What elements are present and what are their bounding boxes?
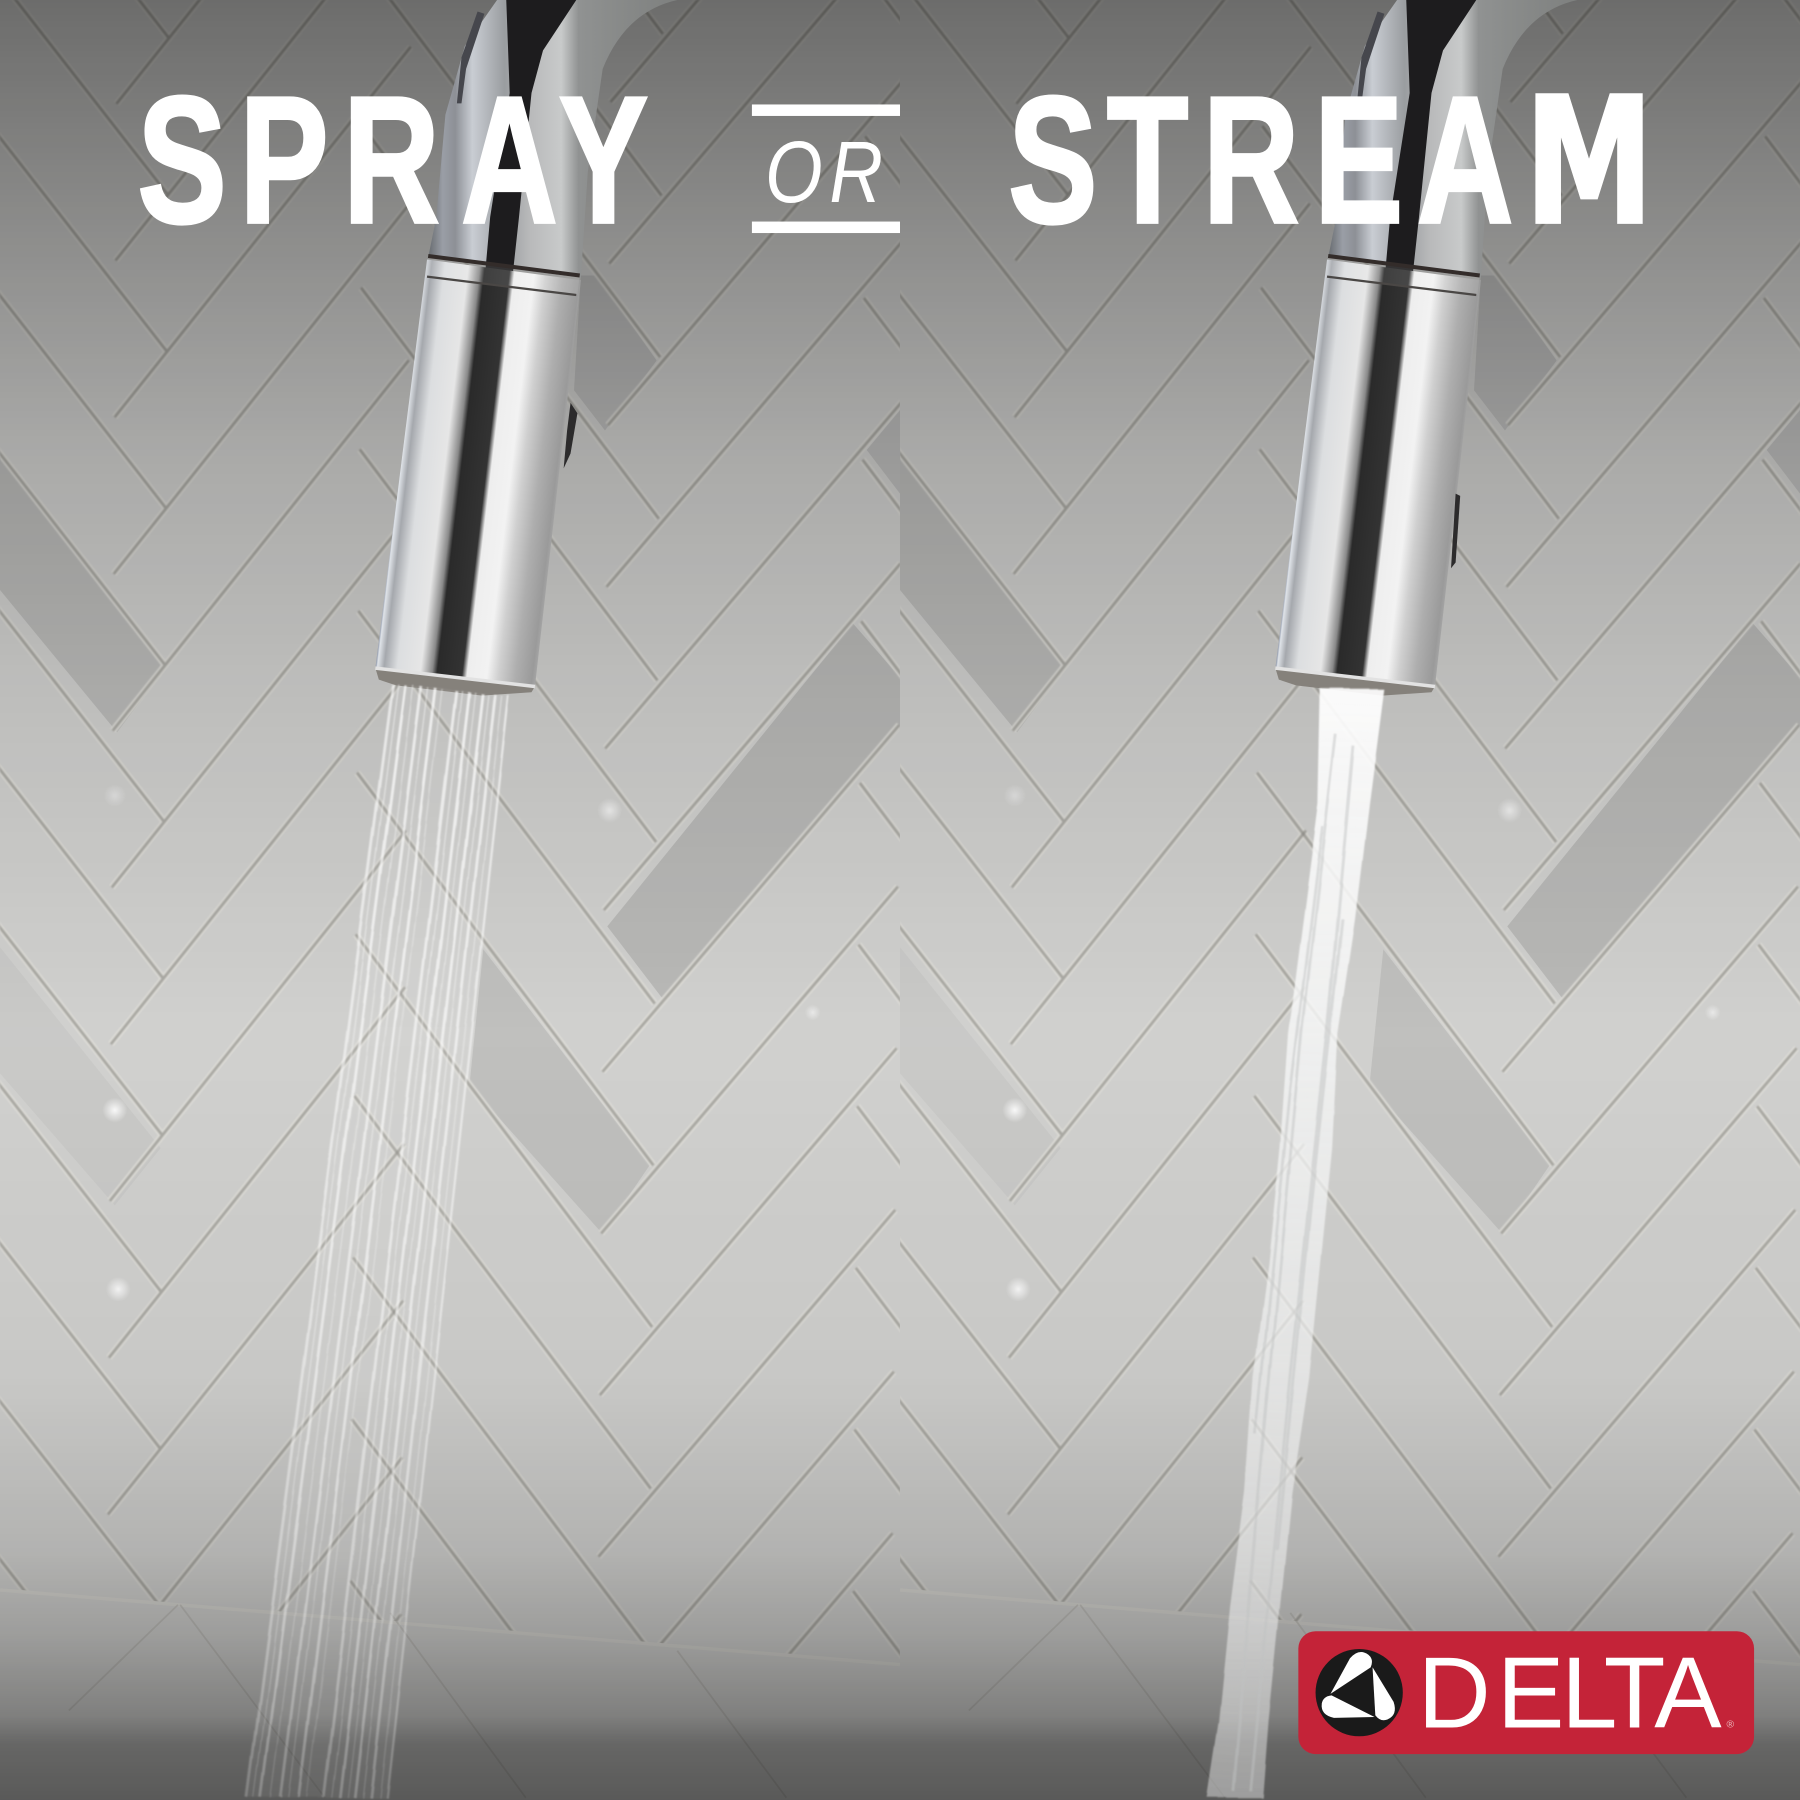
logo red badge [1298,1631,1754,1754]
panel: stream [759,0,1800,1800]
water: spray streaks [247,684,509,1798]
logo wordmark: DELTA [1418,1638,1722,1750]
connector word: OR with rules: OR [765,124,883,221]
water: solid stream [1208,689,1383,1798]
icon: Delta triangle emblem [1316,1649,1409,1738]
title: SPRAY: SPRAY [138,58,648,261]
registered mark: ® [1727,1720,1735,1731]
tile wall background [0,0,1412,1800]
faucet trigger button [564,403,577,468]
icon: faucet spray head [375,0,677,696]
tile wall background [759,0,1800,1800]
icon: faucet stream head [1275,0,1577,696]
faucet trigger button [1451,494,1460,568]
title: STREAM: STREA [1008,58,1513,261]
connector word: OR with rules [752,104,900,233]
title: STREAM: M [1525,62,1653,264]
logo: Delta [1298,1631,1754,1754]
panel: spray [0,0,1412,1800]
